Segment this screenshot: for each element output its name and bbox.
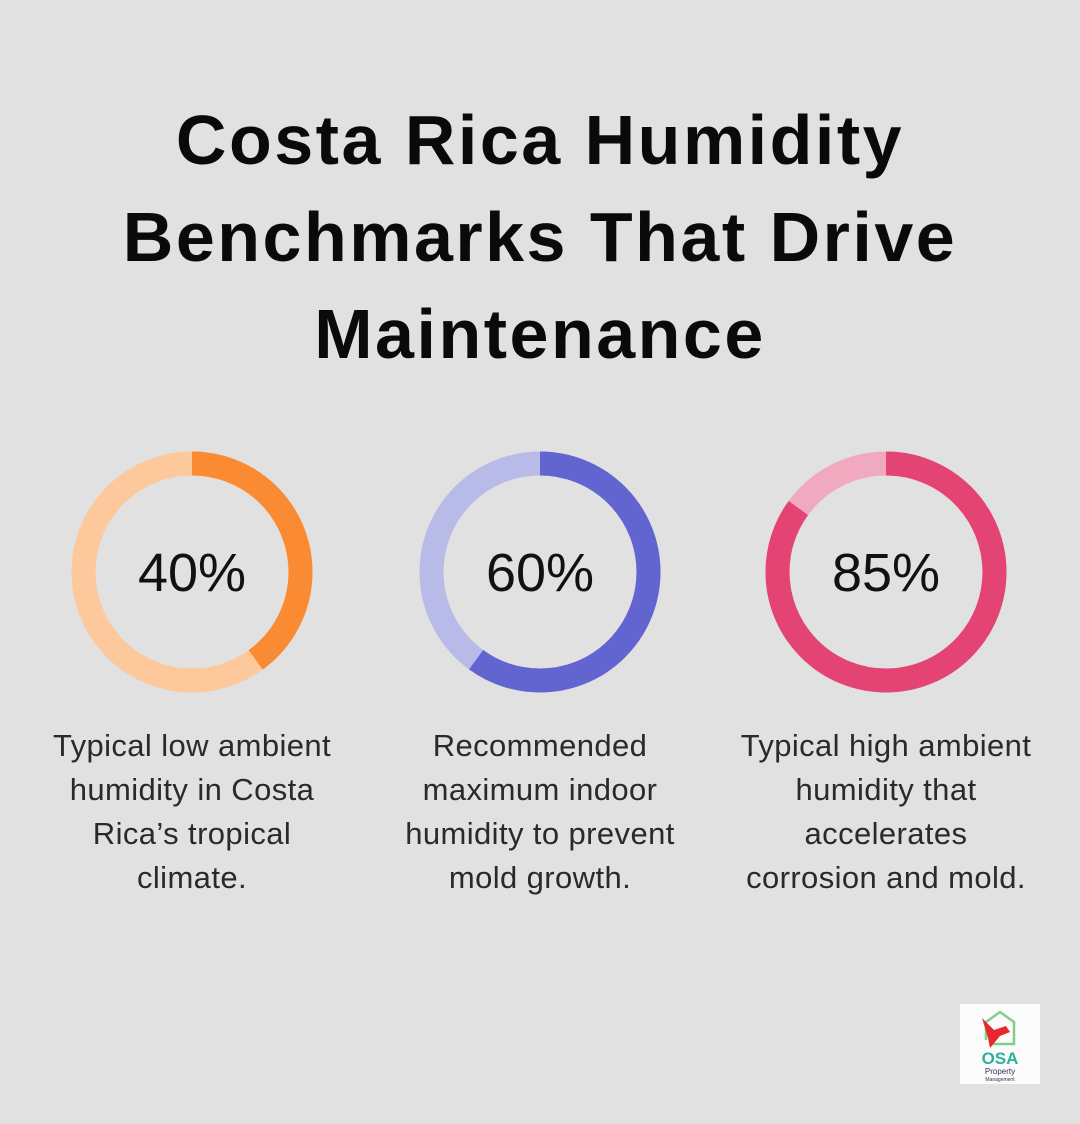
logo: Management [985,1077,1015,1083]
text: 85% description: humidity that [796,772,976,807]
text: 40% description: climate. [137,860,247,895]
text: 60% description: Recommended [433,728,647,763]
title: Benchmarks That Drive [123,198,957,276]
logo: OSA [982,1049,1018,1068]
text: 85% description: Typical high ambient [741,728,1031,763]
text: 40% description [53,728,331,895]
title: Costa Rica Humidity [176,101,904,179]
logo: Property [985,1067,1015,1076]
text: 60% description: humidity to prevent [405,816,675,851]
text: 85% description: accelerates [805,816,967,851]
ring chart: 40% [72,452,312,692]
ring chart: 60% [420,452,660,692]
text: 40% description: humidity in Costa [70,772,314,807]
text: 60% description: maximum indoor [423,772,657,807]
text: 60% description [405,728,675,895]
ring chart: 85%: 85% [832,543,940,603]
ring chart: 60%: 60% [486,543,594,603]
text: 85% description [741,728,1031,895]
logo [960,1004,1040,1084]
text: 85% description: corrosion and mold. [746,860,1026,895]
title: Maintenance [314,295,766,373]
ring chart: 85% [766,452,1006,692]
text: 60% description: mold growth. [449,860,631,895]
text: 40% description: Typical low ambient [53,728,331,763]
text: 40% description: Rica’s tropical [93,816,291,851]
title [123,101,957,373]
ring chart: 40%: 40% [138,543,246,603]
